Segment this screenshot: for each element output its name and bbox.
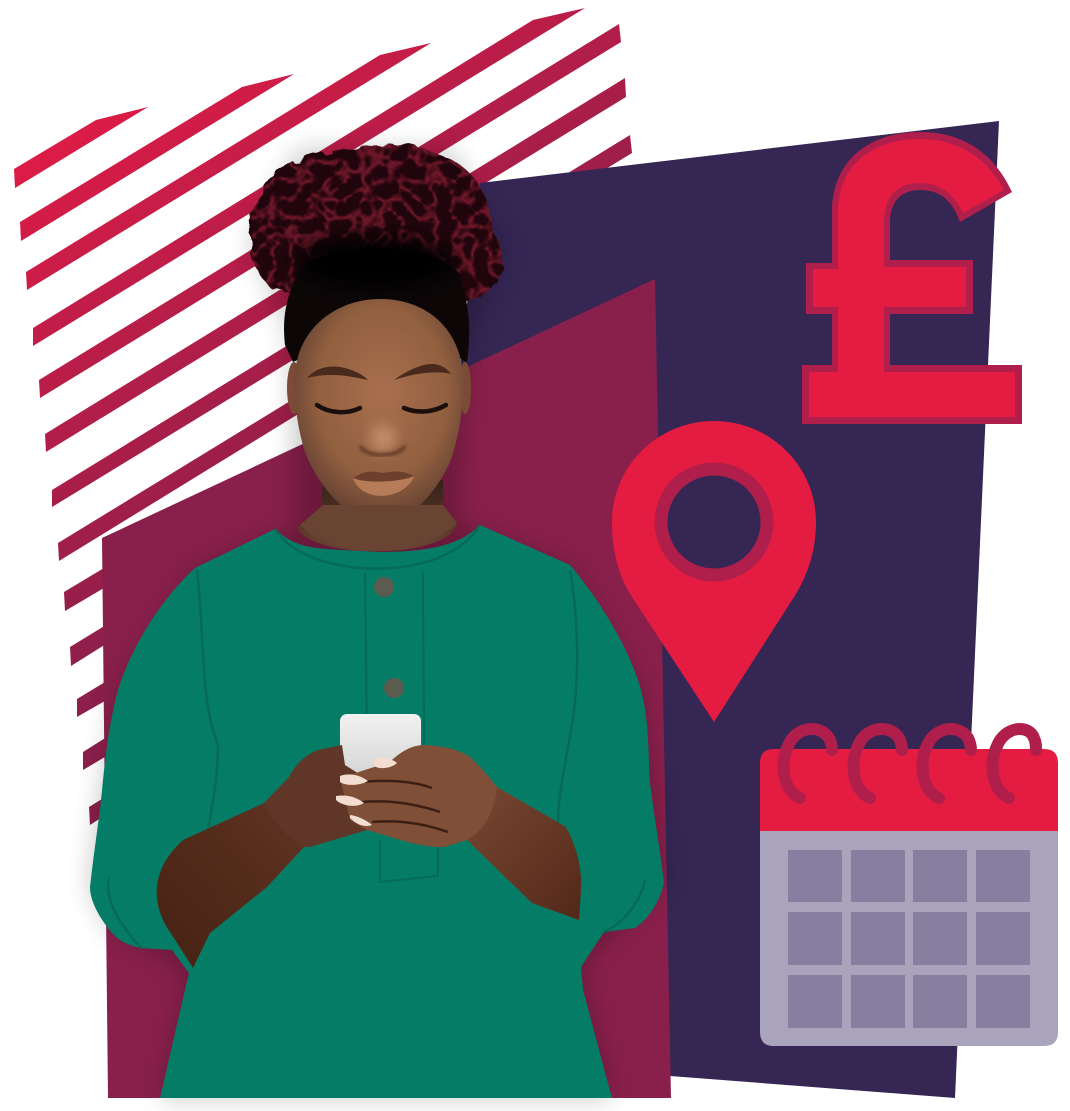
icon: pound sign: [802, 132, 1022, 424]
face: [295, 299, 463, 522]
icon: calendar: [760, 729, 1058, 1046]
neck: [297, 480, 457, 551]
calendar header: [760, 749, 1058, 831]
diagonal stripes: [14, 8, 632, 825]
ears: [287, 362, 471, 414]
nails: [336, 757, 397, 826]
finger creases: [360, 781, 448, 832]
lips: [353, 471, 414, 496]
sleeve folds: [108, 570, 645, 948]
hands: [264, 745, 497, 847]
green top: [90, 525, 664, 1098]
placket: [365, 572, 424, 745]
right hand: [340, 745, 497, 847]
calendar rings: [784, 729, 1036, 798]
panel: navy background shape: [460, 121, 999, 1098]
eyebrows: [307, 364, 451, 380]
left forearm: [157, 803, 304, 968]
left hand: [264, 745, 400, 847]
slicked hair: [284, 248, 469, 362]
person shadow: [90, 150, 664, 1098]
phone: [340, 714, 421, 776]
neck front: [300, 505, 457, 550]
hair bun: [251, 144, 503, 300]
placket flap: [380, 840, 438, 882]
panel: maroon background shape: [102, 279, 671, 1098]
collar shading: [275, 525, 480, 569]
buttons: [374, 577, 404, 698]
nose: [360, 424, 405, 455]
calendar body: [760, 831, 1058, 1046]
eyes: [317, 405, 446, 412]
calendar grid: [788, 850, 1030, 1028]
right forearm: [467, 787, 581, 920]
person: [90, 144, 664, 1098]
icon: location pin: [612, 421, 816, 722]
dark hair core: [295, 236, 455, 288]
